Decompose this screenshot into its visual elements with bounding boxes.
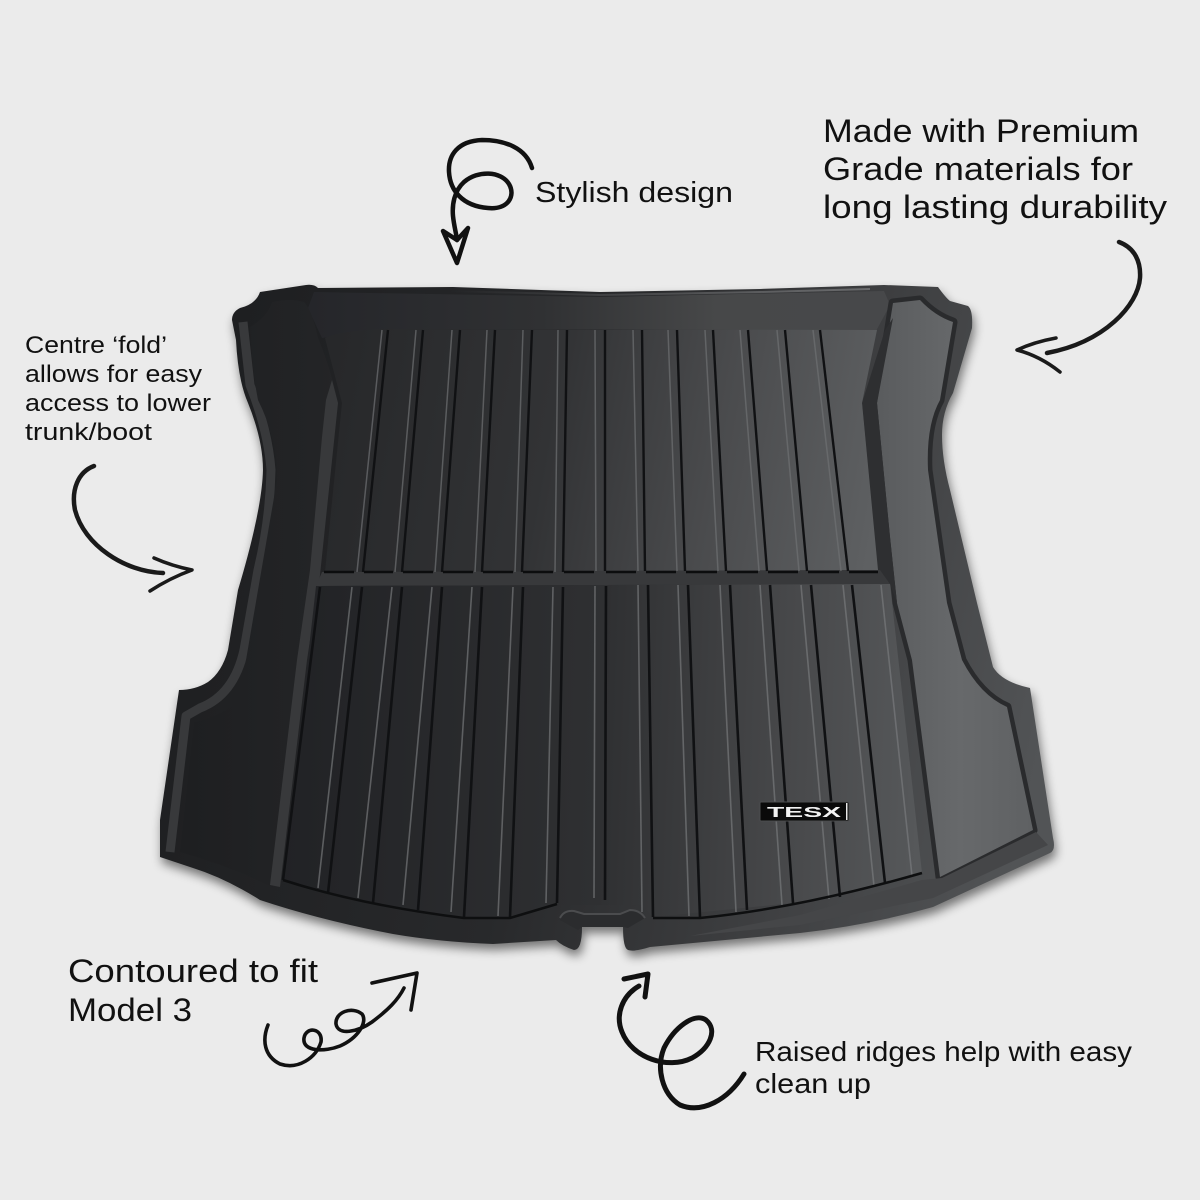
text: Made with Premium Grade materials: Made with Premium [823,113,1139,149]
text: Contoured to fit: Model 3 [68,992,192,1028]
arrow: raised ridges [619,974,744,1108]
upper rib bottom shadows [324,571,878,573]
TESX badge [760,802,849,821]
left side lighter band [170,322,271,852]
lower rib dark grooves [283,585,885,917]
text: Contoured to fit: Contoured to fit [68,953,318,989]
right side surface with trench [877,300,1033,877]
upper ribbed panel [325,329,878,572]
fold band [316,570,890,586]
badge wordmark: TESX [767,804,841,821]
centre notch ledge [560,910,645,930]
text: Stylish design: Stylish design [535,177,733,209]
badge divider [846,803,848,820]
notch edge [560,910,645,918]
upper rib dark grooves [363,330,848,572]
arrow: stylish design [443,140,532,263]
arrow: centre fold [74,466,192,591]
lower rib light ridges [318,585,912,916]
top rim band [308,291,890,338]
lower panel front edge [283,873,922,918]
left side surface [180,300,338,887]
left raised side [170,300,338,887]
left side light strip [270,380,338,887]
text: Centre fold: trunk/boot [25,419,152,446]
mat outer rim [160,285,1054,951]
right raised side [690,300,1048,936]
text: Made with Premium Grade materials [823,113,1167,225]
mat shadow [162,291,1056,957]
arrow: contoured [265,973,417,1066]
text: Made with Premium Grade materials: Grade materials for [823,151,1133,187]
top rim highlight [450,289,870,295]
text: Centre fold: allows for easy [25,361,203,388]
text: Raised ridges: clean up [755,1068,871,1099]
right side inner wall [862,318,897,603]
arrow: premium materials [1017,242,1140,372]
text: Made with Premium Grade materials: long lasting durability [823,189,1167,225]
right side sill [690,832,1048,936]
product: trunk mat [160,285,1056,957]
text: Centre fold [25,332,211,446]
text: Raised ridges [755,1036,1132,1099]
text: Centre fold: Centre ‘fold’ [25,332,167,359]
lower ribbed panel [283,584,922,917]
text: Centre fold: access to lower [25,390,211,417]
text: Contoured to fit [68,953,318,1028]
text: Raised ridges: Raised ridges help with easy [755,1036,1132,1067]
upper rib light ridges [357,330,841,572]
badge plate [760,802,849,821]
